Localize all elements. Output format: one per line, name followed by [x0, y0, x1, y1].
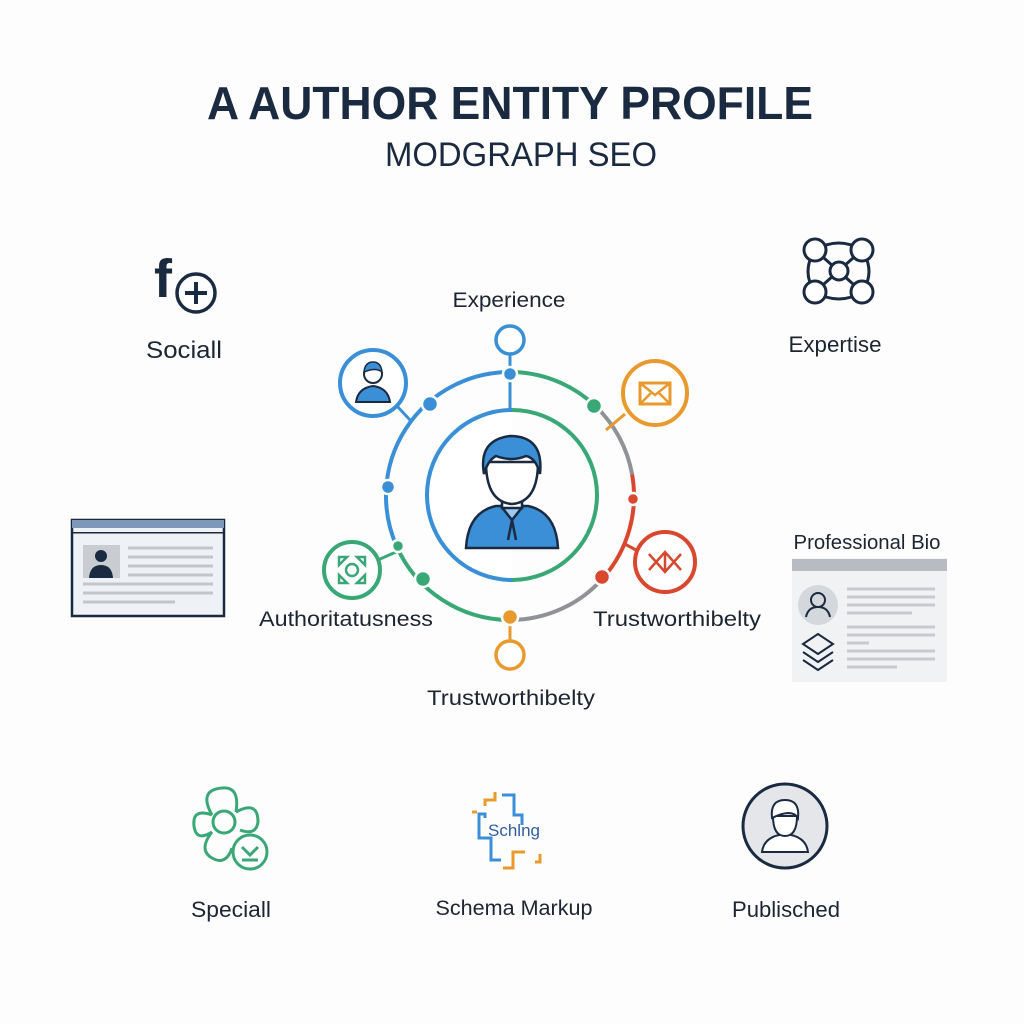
node: person satellite [340, 350, 406, 416]
label: trustworthibelty right: Trustworthibelty [593, 608, 762, 631]
connectors [378, 354, 636, 641]
inner circle [427, 410, 512, 580]
outer ring segments [386, 372, 634, 620]
label: schema markup: Schema Markup [436, 897, 592, 920]
node: experience top [496, 326, 524, 354]
subtitle: MODGRAPH SEO [385, 136, 657, 174]
node: bottom [496, 641, 524, 669]
label: speciall: Speciall [191, 897, 271, 922]
icon: central person [466, 436, 558, 548]
label: publisched: Publisched [732, 897, 840, 922]
label: social: Sociall [146, 337, 222, 364]
card: professional bio [792, 532, 947, 682]
node: envelope satellite [623, 361, 687, 425]
node: trust satellite [635, 532, 695, 592]
ring dots [381, 367, 639, 625]
icon: expertise network [804, 239, 873, 303]
icon: social [154, 249, 215, 312]
card: profile left [72, 520, 224, 616]
label: authoritatusness: Authoritatusness [259, 608, 433, 631]
icon: published [743, 784, 827, 868]
title: A AUTHOR ENTITY PROFILE [207, 77, 813, 129]
node: authoritativeness satellite [324, 542, 380, 598]
label: trustworthibelty bottom: Trustworthibelty [427, 687, 596, 710]
icon: schema [472, 792, 540, 868]
icon: schema: Schlng [488, 821, 540, 840]
diagram: entity ring [324, 326, 695, 669]
icon: social: f [154, 249, 173, 309]
icon: speciall [194, 788, 267, 869]
card: professional bio: Professional Bio [794, 532, 940, 554]
label: expertise: Expertise [788, 332, 882, 357]
label: experience: Experience [452, 289, 566, 312]
